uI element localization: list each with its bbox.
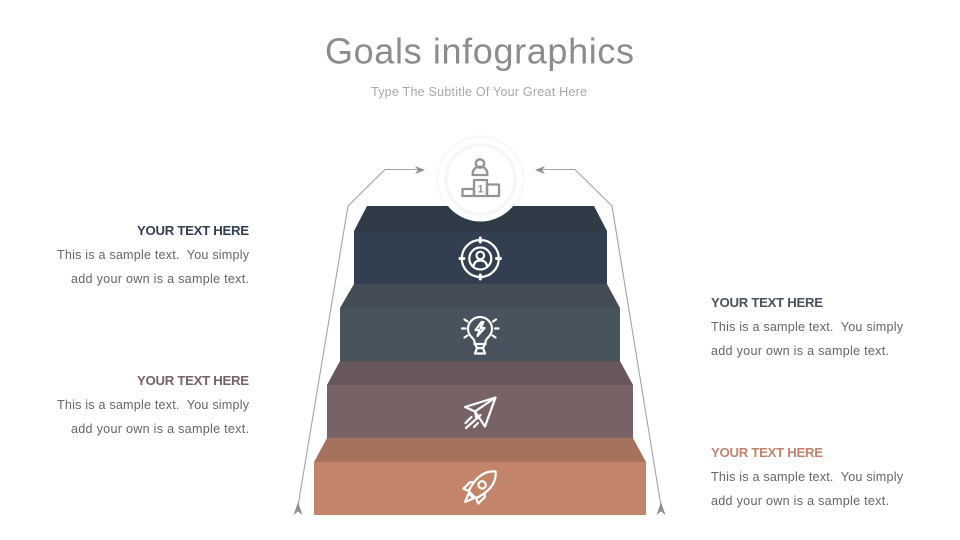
left arrow (294, 166, 425, 515)
text block: lower left (57, 373, 250, 436)
step 3: mauve (327, 361, 633, 438)
text block: lower right: YOUR TEXT HERE (711, 445, 823, 460)
text block: upper right (711, 295, 904, 358)
text block: lower left: YOUR TEXT HERE (137, 373, 249, 388)
staircase (314, 206, 646, 515)
step 1: navy (354, 206, 607, 284)
text block: lower left: This is a sample text. You simply (57, 398, 250, 412)
step 2: slate (340, 284, 620, 361)
right arrow (535, 166, 666, 515)
icon: light bulb (462, 317, 498, 354)
icon: target person (460, 238, 500, 279)
subtitle: Type The Subtitle Of Your Great Here (371, 85, 587, 99)
text block: lower right (711, 445, 904, 508)
text block: upper right: This is a sample text. You simply (711, 320, 904, 334)
text block: upper right: add your own is a sample text. (711, 344, 889, 358)
icon: rocket (458, 464, 503, 509)
text block: lower left: add your own is a sample text. (71, 422, 249, 436)
step 4: terracotta (314, 438, 646, 515)
text block: upper left: add your own is a sample text. (71, 272, 249, 286)
text block: lower right: add your own is a sample text. (711, 494, 889, 508)
icon: paper plane (465, 398, 496, 428)
text block: upper left (57, 223, 250, 286)
text block: upper left: This is a sample text. You simply (57, 248, 250, 262)
text block: upper left: YOUR TEXT HERE (137, 223, 249, 238)
badge circle (438, 138, 522, 222)
title: Goals infographics (325, 30, 634, 72)
icon: podium: 1 (477, 184, 484, 196)
text block: lower right: This is a sample text. You simply (711, 470, 904, 484)
text block: upper right: YOUR TEXT HERE (711, 295, 823, 310)
